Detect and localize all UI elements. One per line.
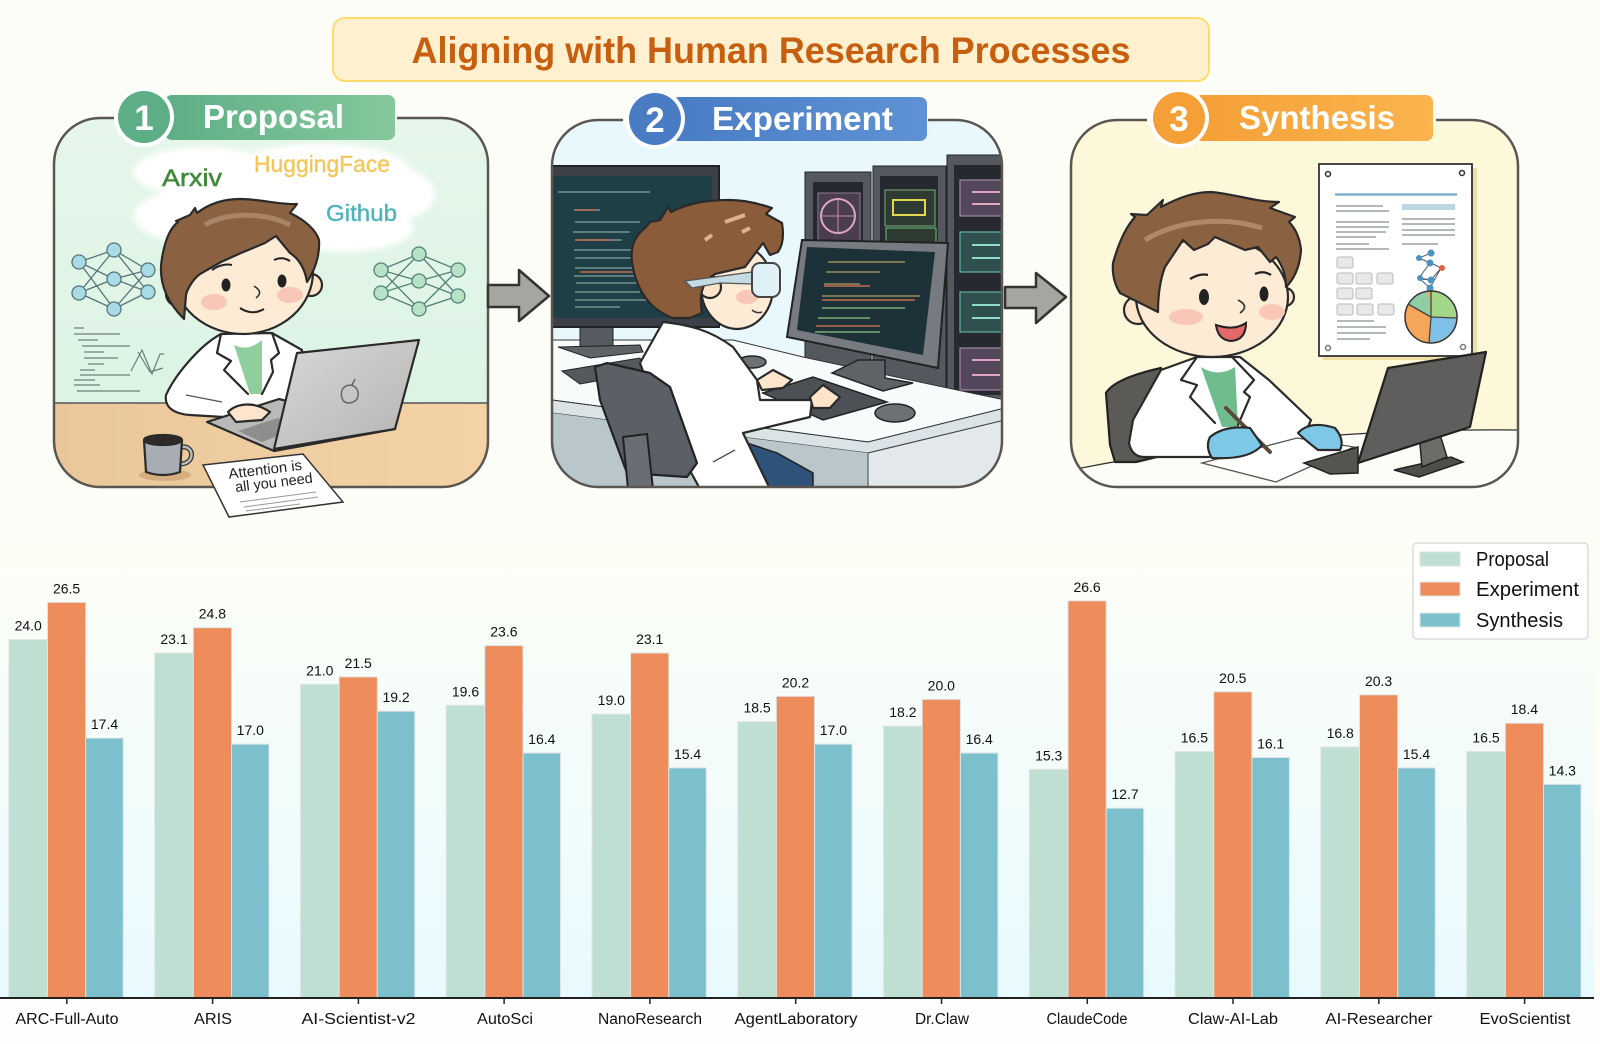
notebook <box>1202 438 1354 482</box>
bars: ARIS <box>155 606 269 998</box>
panel border <box>54 118 488 487</box>
arrow: Experiment to Synthesis <box>1005 273 1066 323</box>
bars: Claw-AI-Lab: 20.5 <box>1219 670 1247 686</box>
bars: ARIS: 23.1 <box>160 631 188 647</box>
bars: AI-Scientist-v2 <box>300 655 415 998</box>
x axis: AI-Researcher <box>1326 1011 1432 1028</box>
bars: AI-Researcher: 20.3 <box>1365 673 1392 689</box>
bars: EvoScientist: 18.4 <box>1511 701 1538 717</box>
panel: Synthesis <box>1071 88 1518 489</box>
x axis <box>0 998 1594 1028</box>
bars: AgentLaboratory <box>738 674 852 998</box>
bars: AI-Scientist-v2: 21.5 <box>345 655 372 671</box>
bars: ARIS: 17.0 <box>237 722 264 738</box>
desk <box>552 340 1005 489</box>
bars: Dr.Claw: 20.0 <box>928 677 955 693</box>
scientist: Experiment <box>632 200 840 489</box>
legend <box>1413 543 1588 639</box>
bars: AutoSci: 16.4 <box>528 731 556 747</box>
gloved hands and pen <box>1208 408 1342 458</box>
badge: 3 Synthesis: 3 <box>1169 100 1189 139</box>
paper: Attention is all you need <box>203 454 343 517</box>
x axis: AutoSci <box>477 1011 533 1028</box>
bars: ARIS: 24.8 <box>199 606 226 622</box>
bars: Claw-AI-Lab: 16.5 <box>1181 730 1208 746</box>
x axis: Claw-AI-Lab <box>1188 1011 1278 1028</box>
x axis: ARC-Full-Auto <box>16 1011 118 1028</box>
bars: AgentLaboratory: 17.0 <box>820 722 847 738</box>
bars: NanoResearch: 15.4 <box>674 746 701 762</box>
bars: NanoResearch: 19.0 <box>598 692 625 708</box>
bars: EvoScientist: 16.5 <box>1472 730 1500 746</box>
x axis: ClaudeCode <box>1046 1011 1128 1028</box>
bars: EvoScientist: 14.3 <box>1549 762 1576 778</box>
x axis: AgentLaboratory <box>734 1011 858 1028</box>
badge: 1 Proposal: Proposal <box>203 98 344 135</box>
bar chart <box>0 579 1594 1028</box>
bars: AgentLaboratory: 18.5 <box>743 700 771 716</box>
x axis: EvoScientist <box>1480 1011 1571 1028</box>
bars: AI-Scientist-v2: 19.2 <box>382 689 410 705</box>
bars: AutoSci: 19.6 <box>452 683 479 699</box>
bars: ARC-Full-Auto <box>9 580 123 998</box>
bars: AI-Researcher <box>1321 673 1435 998</box>
bars: NanoResearch <box>592 631 706 998</box>
cloud of sources: Arxiv <box>162 165 222 192</box>
badge: 3 Synthesis <box>1147 88 1436 148</box>
chair <box>1106 368 1165 462</box>
keyboard and mouse <box>738 356 915 422</box>
bars: AutoSci: 23.6 <box>490 624 518 640</box>
bars: AI-Researcher: 15.4 <box>1403 746 1430 762</box>
bars: AutoSci <box>446 624 560 998</box>
badge: 2 Experiment: Experiment <box>712 100 893 137</box>
paper: Attention is all you need: Attention is <box>228 458 303 483</box>
bars: ARC-Full-Auto: 26.5 <box>53 580 80 596</box>
code lines and curve <box>74 328 164 391</box>
bars: Dr.Claw <box>884 677 998 998</box>
bars: ARC-Full-Auto: 17.4 <box>91 716 118 732</box>
badge: 3 Synthesis: Synthesis <box>1239 99 1395 136</box>
x axis: NanoResearch <box>598 1011 702 1028</box>
legend: Proposal <box>1476 549 1549 571</box>
panel: Experiment <box>548 89 1009 489</box>
bars: AI-Scientist-v2: 21.0 <box>306 662 334 678</box>
bars: AI-Researcher: 16.8 <box>1327 725 1354 741</box>
title: Aligning with Human Research Processes <box>412 30 1130 71</box>
icon: coffee mug <box>139 435 192 481</box>
x axis: AI-Scientist-v2 <box>302 1011 416 1028</box>
arrow: Proposal to Experiment <box>488 270 549 321</box>
panel: Proposal <box>54 87 488 517</box>
title <box>333 18 1209 81</box>
cloud of sources <box>133 144 435 252</box>
badge: 1 Proposal <box>114 87 397 147</box>
legend: Experiment <box>1476 579 1579 601</box>
bars: EvoScientist <box>1467 701 1581 998</box>
panel border <box>1071 120 1518 487</box>
bars: NanoResearch: 23.1 <box>636 631 664 647</box>
bars: Dr.Claw: 18.2 <box>889 704 917 720</box>
left monitor <box>548 166 719 384</box>
icon: neural network right <box>374 247 465 316</box>
cloud of sources: HuggingFace <box>254 151 390 177</box>
scientist: Proposal <box>161 199 322 418</box>
bars: ClaudeCode <box>1029 579 1144 998</box>
poster <box>1319 164 1477 360</box>
icon: laptop <box>207 340 419 451</box>
bars: Dr.Claw: 16.4 <box>966 731 993 747</box>
legend: Synthesis <box>1476 610 1563 632</box>
desk <box>1071 430 1518 489</box>
right monitor <box>787 240 948 391</box>
x axis: ARIS <box>194 1011 232 1028</box>
server racks <box>805 155 1009 405</box>
badge: 2 Experiment: 2 <box>645 101 665 140</box>
bars: Claw-AI-Lab <box>1175 670 1289 998</box>
bars: AgentLaboratory: 20.2 <box>782 674 809 690</box>
paper: Attention is all you need: all you need <box>234 471 314 496</box>
bars: ClaudeCode: 15.3 <box>1035 747 1063 763</box>
x axis: Dr.Claw <box>915 1011 970 1028</box>
scientist: Synthesis <box>1113 192 1311 457</box>
panel border <box>552 120 1002 487</box>
cloud of sources: Github <box>326 200 397 226</box>
bars: ARC-Full-Auto: 24.0 <box>15 618 42 634</box>
bars: ClaudeCode: 26.6 <box>1073 579 1101 595</box>
badge: 2 Experiment <box>623 89 928 149</box>
chair <box>595 363 697 489</box>
computer <box>1304 352 1486 477</box>
bars: Claw-AI-Lab: 16.1 <box>1257 736 1285 752</box>
icon: neural network left <box>72 243 155 316</box>
badge: 1 Proposal: 1 <box>134 99 154 138</box>
bars: ClaudeCode: 12.7 <box>1111 786 1139 802</box>
